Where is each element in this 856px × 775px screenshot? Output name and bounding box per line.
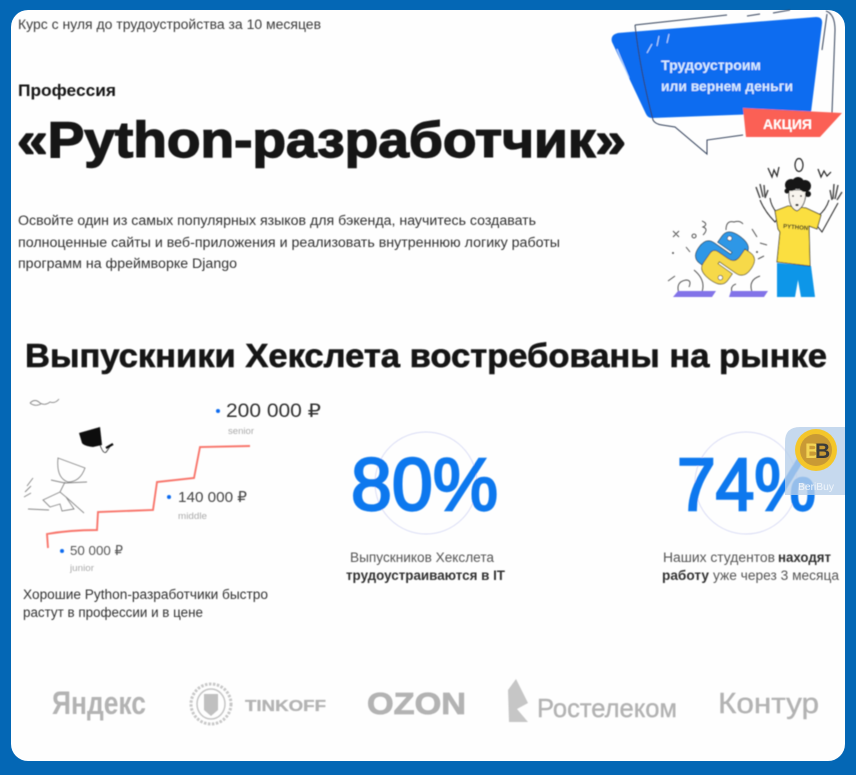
chart caption <box>23 587 268 620</box>
stat: 74 percent: находят <box>778 550 831 565</box>
tagline: Курс с нуля до трудоустройства за 10 месяцев <box>18 17 321 32</box>
illustration: surprised developer and python logo: PYTHON <box>783 224 808 232</box>
stat: 74 percent: Наших студентов <box>663 550 775 565</box>
logo: Ozon: OZON <box>367 686 466 721</box>
senior salary: 200 000 ₽ <box>226 401 321 422</box>
open laptop <box>673 291 768 297</box>
logo: Rostelecom: Ростелеком <box>537 693 677 723</box>
stat: 80 percent: Выпускников Хекслета <box>350 550 494 565</box>
doodles <box>668 221 767 296</box>
callout: job guarantee: или вернем деньги <box>661 79 793 94</box>
head and hair <box>789 190 806 211</box>
logo: Rostelecom <box>508 679 677 723</box>
badge: BeriBuy watermark: B <box>805 440 820 463</box>
chart caption: Хорошие Python-разработчики быстро <box>23 587 268 602</box>
stat: 74 percent: работу <box>662 568 709 583</box>
middle salary <box>167 489 247 521</box>
badge: sale <box>743 108 842 137</box>
raised arms <box>760 198 838 232</box>
chart: salary staircase <box>24 399 321 573</box>
junior salary <box>60 543 123 573</box>
middle salary: 140 000 ₽ <box>178 489 247 506</box>
logo: Kontur: Контур <box>718 688 819 720</box>
stat: 74 percent: 74% <box>677 443 816 526</box>
badge: BeriBuy watermark <box>785 427 845 495</box>
section heading: Выпускники Хекслета востребованы на рынке <box>25 337 827 374</box>
senior salary <box>216 401 321 436</box>
stat: 80 percent: трудоустраиваются в IT <box>346 568 506 583</box>
logos row <box>52 679 819 724</box>
description <box>18 213 560 271</box>
stick figure doodle <box>24 399 87 513</box>
wow letters <box>768 158 831 177</box>
title: «Python-разработчик» <box>17 112 626 168</box>
badge: BeriBuy watermark: BeriBuy <box>798 482 834 493</box>
chart caption: растут в профессии и в цене <box>23 605 203 620</box>
logo: Tinkoff <box>191 684 326 724</box>
heading: profession: Профессия <box>18 81 116 100</box>
illustration: surprised developer and python logo <box>668 158 842 297</box>
graduation cap <box>79 427 113 453</box>
junior salary: junior <box>69 563 94 573</box>
trousers <box>777 263 815 297</box>
description: полноценные сайты и веб-приложения и реализовать внутреннюю логику работы <box>18 235 560 250</box>
logo: Tinkoff: TINKOFF <box>245 698 326 715</box>
badge: sale: АКЦИЯ <box>763 117 812 132</box>
python logo <box>687 221 763 295</box>
stat: 74 percent <box>662 432 839 583</box>
logo: Yandex: Яндекс <box>52 685 146 721</box>
description: Освойте один из самых популярных языков для бэкенда, научитесь создавать <box>18 213 536 228</box>
middle salary: middle <box>178 511 207 521</box>
junior salary: 50 000 ₽ <box>70 543 123 558</box>
stat: 80 percent <box>346 432 506 583</box>
badge: BeriBuy watermark: B <box>815 440 830 463</box>
senior salary: senior <box>228 426 254 436</box>
yellow shirt <box>775 206 821 266</box>
description: программ на фреймворке Django <box>18 256 237 271</box>
staircase line <box>47 446 250 548</box>
stat: 80 percent: 80% <box>351 443 498 526</box>
callout: job guarantee <box>612 10 842 154</box>
callout: job guarantee: Трудоустроим <box>661 58 761 73</box>
stat: 74 percent: уже через 3 месяца <box>713 568 839 583</box>
